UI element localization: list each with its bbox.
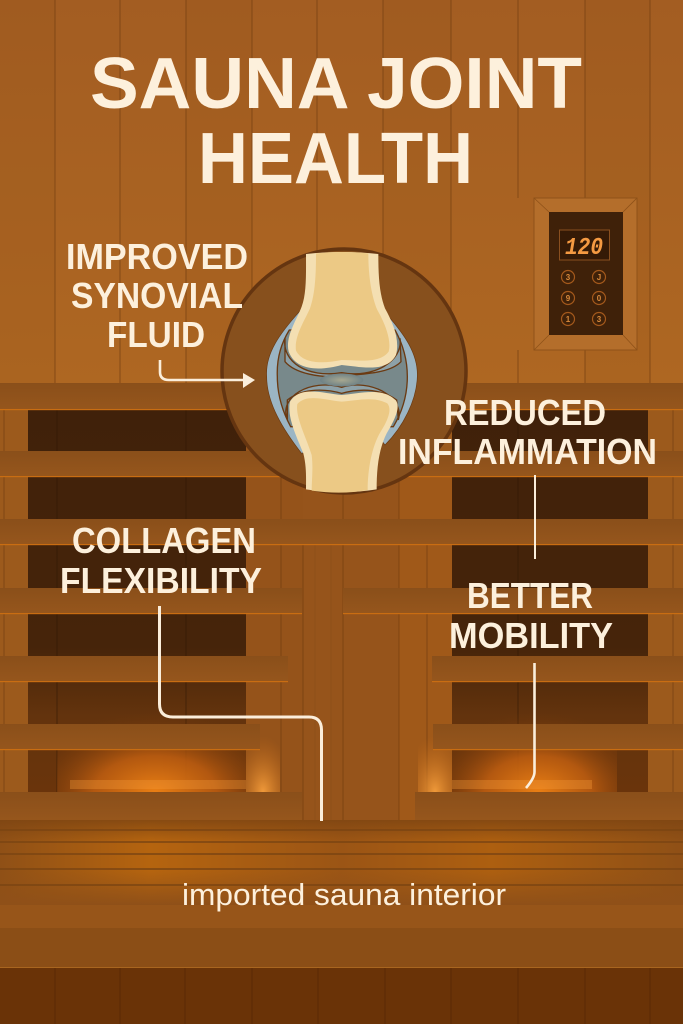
label: improved synovial fluid: IMPROVED bbox=[66, 236, 248, 277]
panel buttons: 9 bbox=[566, 294, 571, 303]
meniscus disc bbox=[320, 374, 363, 386]
joint diagram bbox=[222, 249, 466, 493]
label: reduced inflammation bbox=[398, 392, 657, 472]
control panel bbox=[534, 198, 637, 350]
label: improved synovial fluid bbox=[66, 236, 248, 355]
panel buttons: 1 bbox=[566, 315, 571, 324]
panel buttons bbox=[562, 270, 606, 326]
dark lower wall planks bbox=[0, 968, 683, 1024]
cartilage layers bbox=[285, 338, 401, 420]
reduced inflammation connector line bbox=[534, 475, 536, 559]
title bbox=[90, 44, 582, 199]
label: collagen flexibility: COLLAGEN bbox=[72, 520, 256, 561]
tibia bone bbox=[289, 391, 398, 493]
panel wood frame bbox=[534, 198, 637, 350]
lower wall posts bbox=[0, 385, 683, 821]
title: HEALTH bbox=[198, 119, 473, 199]
synovial fluid arrow bbox=[160, 360, 255, 388]
panel buttons: 0 bbox=[597, 294, 602, 303]
panel buttons: 3 bbox=[597, 315, 602, 324]
femur bone bbox=[288, 252, 397, 369]
better mobility connector line bbox=[526, 663, 534, 788]
label: better mobility bbox=[449, 575, 613, 656]
panel buttons: 3 bbox=[566, 273, 571, 282]
label: better mobility: MOBILITY bbox=[449, 615, 613, 656]
bench slats bbox=[0, 383, 683, 820]
title: SAUNA JOINT bbox=[90, 44, 582, 124]
label: improved synovial fluid: FLUID bbox=[107, 314, 205, 355]
caption: imported sauna interior bbox=[182, 877, 506, 912]
panel face bbox=[549, 212, 623, 335]
label: collagen flexibility bbox=[60, 520, 262, 601]
joint circle background bbox=[222, 249, 466, 493]
label: better mobility: BETTER bbox=[467, 575, 593, 616]
sauna window right bbox=[418, 410, 648, 792]
synovial fluid bbox=[277, 330, 407, 427]
label: collagen flexibility: FLEXIBILITY bbox=[60, 560, 262, 601]
label: improved synovial fluid: SYNOVIAL bbox=[71, 275, 243, 316]
temperature display: 120 bbox=[565, 235, 603, 262]
label: reduced inflammation: INFLAMMATION bbox=[398, 431, 657, 472]
floor boards bbox=[0, 820, 683, 968]
sauna window left bbox=[28, 410, 280, 792]
label: reduced inflammation: REDUCED bbox=[444, 392, 606, 433]
panel buttons: J bbox=[597, 273, 601, 282]
synovial membrane bbox=[267, 312, 417, 454]
collagen connector line bbox=[160, 606, 322, 821]
